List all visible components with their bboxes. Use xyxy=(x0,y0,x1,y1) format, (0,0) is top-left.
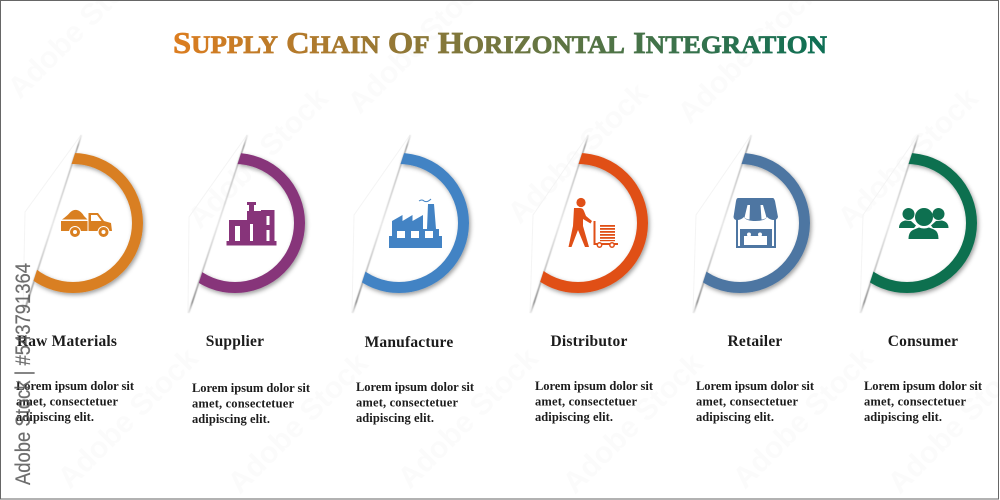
folded paper edge xyxy=(23,135,82,313)
icon: worker with trolley xyxy=(568,198,618,247)
watermark pattern: Adobe Stock xyxy=(222,347,375,500)
folded paper edge xyxy=(693,135,752,313)
stock id overlay: Adobe Stock | #543791364 xyxy=(12,263,35,485)
ring xyxy=(334,158,464,288)
text block: Lorem ipsum dolor sit xyxy=(192,381,311,395)
icon: group of people xyxy=(899,208,948,239)
text block: amet, consectetuer xyxy=(864,394,966,408)
watermark pattern: Adobe Stock xyxy=(52,342,205,495)
panel: consumer xyxy=(860,135,982,424)
panel: raw materials xyxy=(8,135,138,424)
text block xyxy=(864,379,983,424)
ring xyxy=(514,158,642,288)
text block: amet, consectetuer xyxy=(696,394,798,408)
heading: Distributor xyxy=(550,333,628,350)
text block: amet, consectetuer xyxy=(535,394,637,408)
icon: factory xyxy=(389,199,442,248)
text block: adipiscing elit. xyxy=(16,410,94,424)
text block: Lorem ipsum dolor sit xyxy=(696,379,815,393)
text block: adipiscing elit. xyxy=(696,410,774,424)
folded paper edge xyxy=(352,135,411,313)
watermark pattern: Adobe Stock xyxy=(182,82,335,235)
ring xyxy=(676,158,804,288)
text block: amet, consectetuer xyxy=(16,394,118,408)
text block xyxy=(192,381,311,426)
heading: Supplier xyxy=(206,333,264,350)
ring xyxy=(8,158,138,288)
icon: industrial plant xyxy=(226,202,276,246)
folded paper edge xyxy=(188,135,248,313)
ring xyxy=(842,158,972,288)
text block xyxy=(16,379,135,424)
heading: Consumer xyxy=(888,333,958,350)
icon: truck xyxy=(61,210,112,238)
panel: distributor xyxy=(530,135,653,424)
text block: adipiscing elit. xyxy=(356,411,434,425)
text block: adipiscing elit. xyxy=(192,412,270,426)
ring xyxy=(170,158,300,288)
watermark pattern: Adobe Stock xyxy=(392,342,545,495)
text block: adipiscing elit. xyxy=(535,410,613,424)
watermark pattern: Adobe Stock xyxy=(557,347,710,500)
panel: supplier xyxy=(188,135,310,426)
folded paper edge xyxy=(530,135,589,313)
watermark pattern: Adobe Stock xyxy=(832,82,985,235)
folded paper edge xyxy=(860,135,919,313)
text block: adipiscing elit. xyxy=(864,410,942,424)
panel: retailer xyxy=(692,135,814,424)
icon: storefront xyxy=(734,198,778,248)
text block: Lorem ipsum dolor sit xyxy=(864,379,983,393)
watermark pattern: Adobe Stock xyxy=(727,342,880,495)
text block xyxy=(356,380,475,425)
panel: manufacture xyxy=(352,135,474,424)
heading: Raw Materials xyxy=(17,333,117,350)
text block: Lorem ipsum dolor sit xyxy=(16,379,135,393)
heading: Retailer xyxy=(728,333,782,350)
text block xyxy=(696,379,815,424)
text block: Lorem ipsum dolor sit xyxy=(535,379,654,393)
heading: Manufacture xyxy=(365,334,453,351)
watermark pattern: Adobe Stock xyxy=(502,77,655,230)
text block: amet, consectetuer xyxy=(356,396,458,410)
title: SUPPLY CHAIN OF HORIZONTAL INTEGRATION xyxy=(173,25,828,60)
text block: Lorem ipsum dolor sit xyxy=(356,380,475,394)
text block: amet, consectetuer xyxy=(192,396,294,410)
text block xyxy=(535,379,654,424)
